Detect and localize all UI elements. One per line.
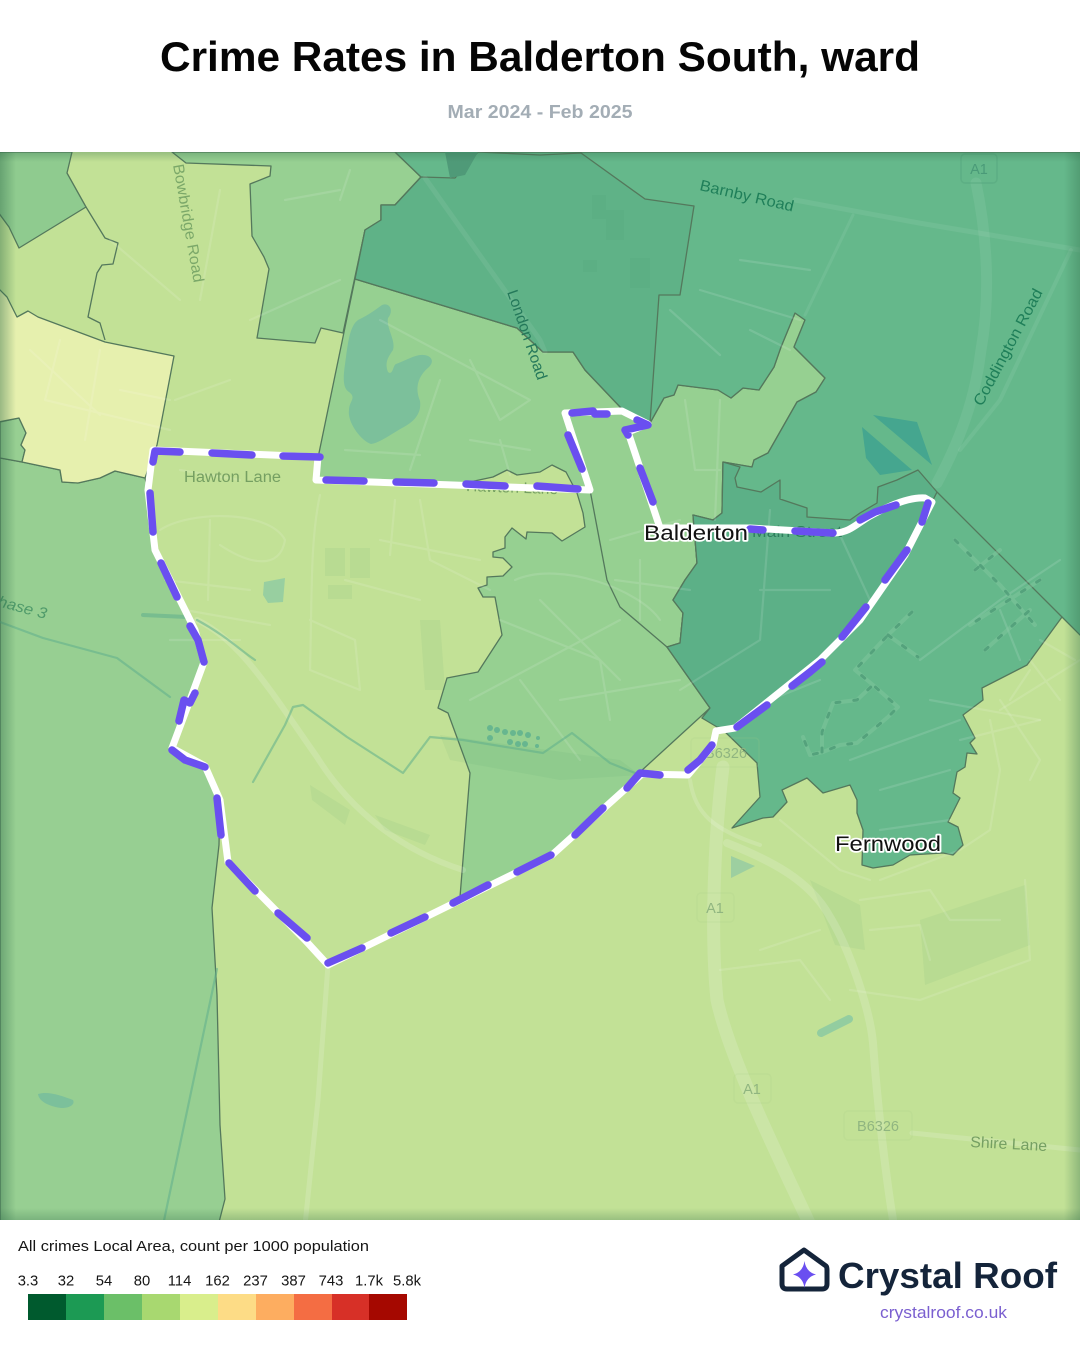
subtitle: date range: Mar 2024 - Feb 2025	[448, 101, 632, 122]
road labels: Hawton Lane	[184, 469, 281, 486]
logo: Crystal Roof	[782, 1250, 1058, 1322]
choropleth areas	[0, 152, 1080, 1230]
map panel	[0, 152, 1080, 1230]
legend	[18, 1239, 422, 1320]
pond cluster	[487, 725, 540, 748]
legend colour scale	[28, 1294, 407, 1320]
legend values: 32	[58, 1274, 74, 1290]
legend values: 387	[281, 1274, 306, 1290]
road shield labels: B6326	[857, 1119, 899, 1135]
road shield labels: A1	[970, 162, 988, 178]
water bodies	[38, 304, 932, 1108]
legend values: 1.7k	[355, 1274, 384, 1290]
legend values: 743	[319, 1274, 343, 1290]
land-use patches	[310, 548, 1030, 984]
legend values	[18, 1274, 422, 1290]
legend title: All crimes Local Area, count per 1000 population	[18, 1239, 369, 1255]
legend values: 54	[96, 1274, 112, 1290]
legend values: 237	[243, 1274, 268, 1290]
road shields	[730, 160, 998, 767]
road shield labels: B6326	[705, 746, 747, 762]
title: Crime Rates in Balderton South, ward	[160, 33, 920, 80]
icon: house with star	[782, 1250, 827, 1289]
road labels: Coddington Road	[971, 286, 1047, 409]
ward boundary: Balderton South	[148, 411, 932, 965]
place label: Balderton: Balderton	[644, 521, 748, 545]
road shield labels: A1	[743, 1082, 761, 1098]
legend values: 5.8k	[393, 1274, 422, 1290]
legend values: 3.3	[18, 1274, 38, 1290]
legend values: 80	[134, 1274, 150, 1290]
wordmark: Crystal Roof	[838, 1255, 1058, 1296]
road labels: Bowbridge Road	[169, 163, 207, 284]
road labels: Barnby Road	[698, 177, 795, 215]
road network	[0, 170, 1080, 1230]
road shield labels: A1	[706, 901, 724, 917]
legend values: 114	[168, 1274, 191, 1290]
road labels: Shire Lane	[970, 1134, 1048, 1155]
footpaths	[803, 540, 1040, 755]
road labels	[0, 163, 1048, 1155]
website: crystalroof.co.uk	[880, 1304, 1008, 1322]
legend values: 162	[205, 1274, 230, 1290]
road shield labels	[705, 162, 988, 1135]
road labels: London Road	[503, 288, 550, 382]
road labels: Hawton Lane	[466, 478, 558, 498]
streams	[0, 615, 640, 1230]
map edge shading	[0, 152, 1080, 1220]
road labels: Main Street	[752, 524, 843, 541]
place label: Fernwood: Fernwood	[835, 832, 941, 856]
